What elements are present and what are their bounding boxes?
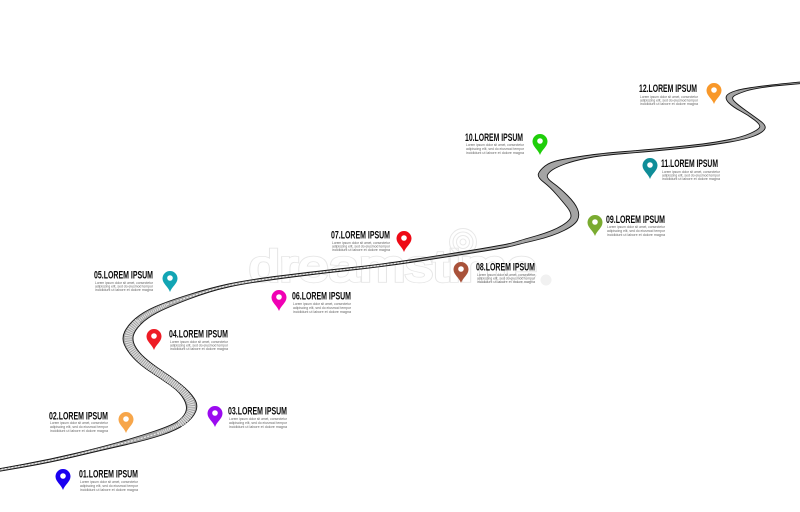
text block 07: Lorem ipsum dolor sit amet, consectetur	[332, 241, 391, 245]
heading 04: 04.LOREM IPSUM	[169, 328, 228, 340]
icon: olive green pin	[588, 215, 602, 236]
milestone 01	[56, 468, 139, 492]
railway ties	[0, 261, 410, 470]
text block 09: Lorem ipsum dolor sit amet, consectetur	[607, 225, 666, 229]
icon: orange pin	[118, 412, 134, 433]
icon: brown pin	[454, 262, 468, 283]
icon: red pin	[396, 231, 412, 252]
text block 03: adipiscing elit, sed do eiusmod tempor	[229, 421, 288, 425]
text block 02	[50, 421, 109, 433]
text block 02: incididunt ut labore et dolore magna	[50, 429, 108, 433]
text block 12: Lorem ipsum dolor sit amet, consectetur	[640, 95, 699, 99]
text block 09: adipiscing elit, sed do eiusmod tempor	[607, 229, 666, 233]
text block 07: incididunt ut labore et dolore magna	[332, 248, 390, 252]
text block 06: adipiscing elit, sed do eiusmod tempor	[293, 306, 352, 310]
text block 09	[607, 225, 666, 237]
text block 04: Lorem ipsum dolor sit amet, consectetur	[170, 340, 229, 344]
milestone 08	[454, 262, 536, 284]
heading 02: 02.LOREM IPSUM	[49, 410, 108, 422]
heading 09: 09.LOREM IPSUM	[606, 214, 665, 226]
text block 02: adipiscing elit, sed do eiusmod tempor	[50, 425, 109, 429]
text block 10: adipiscing elit, sed do eiusmod tempor	[466, 147, 525, 151]
text block 06: Lorem ipsum dolor sit amet, consectetur	[293, 302, 352, 306]
text block 04: incididunt ut labore et dolore magna	[170, 347, 228, 351]
milestone 10	[465, 132, 548, 155]
text block 10	[466, 143, 525, 155]
text block 06	[293, 302, 352, 314]
text block 10: Lorem ipsum dolor sit amet, consectetur	[466, 143, 525, 147]
text block 11: incididunt ut labore et dolore magna	[662, 177, 720, 181]
text block 01: Lorem ipsum dolor sit amet, consectetur	[80, 480, 139, 484]
text block 07	[332, 241, 391, 252]
icon: red pin	[146, 329, 162, 350]
text block 03	[229, 417, 288, 429]
text block 07: adipiscing elit, sed do eiusmod tempor	[332, 244, 391, 248]
text block 09: incididunt ut labore et dolore magna	[607, 233, 665, 237]
milestone 06	[272, 290, 352, 314]
milestone 09	[588, 214, 666, 237]
heading 08: 08.LOREM IPSUM	[476, 262, 535, 274]
text: dreamstime	[249, 242, 537, 291]
text block 10: incididunt ut labore et dolore magna	[466, 151, 524, 155]
icon: purple pin	[208, 406, 222, 427]
text block 03: Lorem ipsum dolor sit amet, consectetur	[229, 417, 288, 421]
heading 03: 03.LOREM IPSUM	[228, 406, 287, 418]
icon: green pin	[532, 134, 548, 155]
text block 04	[170, 340, 229, 351]
text block 05: Lorem ipsum dolor sit amet, consectetur	[95, 281, 154, 285]
winding railway road	[0, 82, 800, 472]
milestone 03	[208, 406, 288, 429]
text block 08: adipiscing elit, sed do eiusmod tempor	[477, 276, 536, 280]
milestone 02	[49, 410, 134, 433]
text block 06: incididunt ut labore et dolore magna	[293, 310, 351, 314]
heading 11: 11.LOREM IPSUM	[661, 158, 718, 170]
text block 12	[640, 95, 699, 106]
text block 11: Lorem ipsum dolor sit amet, consectetur	[662, 170, 721, 174]
text block 08: Lorem ipsum dolor sit amet, consectetur	[477, 273, 536, 277]
milestone 07	[331, 230, 412, 252]
text block 08	[477, 273, 536, 284]
icon: blue pin	[56, 469, 70, 490]
heading 07: 07.LOREM IPSUM	[331, 230, 390, 242]
milestone 12	[639, 83, 722, 106]
text block 05: incididunt ut labore et dolore magna	[95, 288, 153, 292]
heading 01: 01.LOREM IPSUM	[79, 468, 138, 480]
milestone 04	[146, 328, 229, 351]
text block 01	[80, 480, 139, 492]
heading 12: 12.LOREM IPSUM	[639, 83, 697, 95]
text block 11	[662, 170, 721, 181]
text block 03: incididunt ut labore et dolore magna	[229, 425, 287, 429]
text block 04: adipiscing elit, sed do eiusmod tempor	[170, 344, 229, 348]
text block 12: adipiscing elit, sed do eiusmod tempor	[640, 98, 699, 102]
text: dreamstime	[249, 242, 537, 291]
text block 12: incididunt ut labore et dolore magna	[640, 102, 698, 106]
icon: teal pin	[162, 271, 178, 292]
icon: magenta pin	[272, 290, 286, 311]
text block 11: adipiscing elit, sed do eiusmod tempor	[662, 174, 721, 178]
text block 01: incididunt ut labore et dolore magna	[80, 488, 138, 492]
heading 06: 06.LOREM IPSUM	[292, 290, 351, 302]
text block 02: Lorem ipsum dolor sit amet, consectetur	[50, 421, 109, 425]
heading 10: 10.LOREM IPSUM	[465, 132, 523, 144]
icon: amber pin	[706, 83, 722, 104]
milestone 05	[94, 270, 178, 292]
text block 05: adipiscing elit, sed do eiusmod tempor	[95, 284, 154, 288]
text block 08: incididunt ut labore et dolore magna	[477, 280, 535, 284]
text block 01: adipiscing elit, sed do eiusmod tempor	[80, 484, 139, 488]
heading 05: 05.LOREM IPSUM	[94, 270, 153, 282]
text block 05	[95, 281, 154, 292]
milestone 11	[642, 158, 721, 181]
icon: dark teal pin	[642, 158, 658, 179]
